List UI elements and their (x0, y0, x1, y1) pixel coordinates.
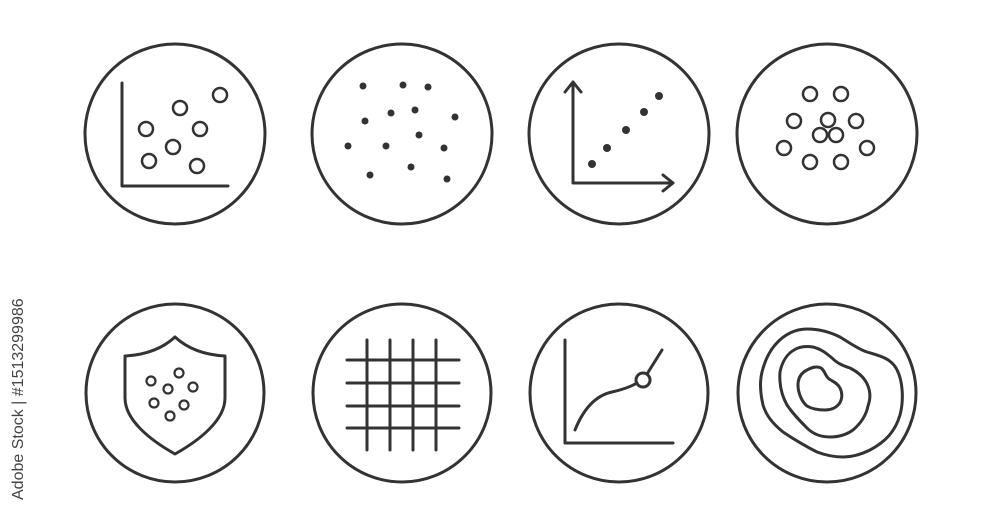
side credit text: Adobe Stock | #1513299986 (10, 298, 27, 500)
icon: random dots (312, 44, 492, 224)
icon: scatter plot with circles (85, 44, 265, 224)
icon: grid (313, 304, 491, 482)
icon: cluster of circles (737, 44, 917, 224)
icon: curve graph with point (530, 304, 708, 482)
icon: contour map (738, 304, 916, 482)
icon: linear trend with arrows (529, 44, 709, 224)
icon: shield with dots (86, 304, 264, 482)
